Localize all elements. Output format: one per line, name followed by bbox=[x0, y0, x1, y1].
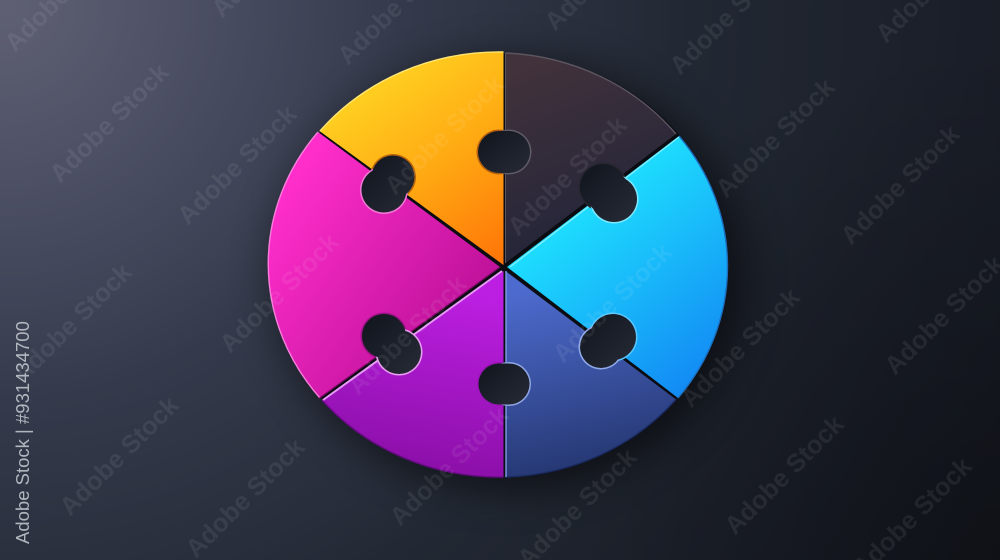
watermarks: Adobe Stock bbox=[379, 70, 510, 200]
piece: yellow bbox=[320, 52, 504, 265]
watermarks: Adobe Stock bbox=[44, 58, 175, 188]
watermarks: Adobe Stock bbox=[710, 73, 841, 203]
watermarks: Adobe Stock bbox=[675, 283, 806, 413]
watermarks: Adobe Stock bbox=[54, 391, 185, 521]
disk shadow bbox=[276, 60, 740, 488]
watermarks: Adobe Stock bbox=[835, 120, 966, 250]
watermarks: Adobe Stock bbox=[7, 258, 138, 388]
piece: dark bbox=[506, 53, 676, 263]
hole: blue and purple joint bbox=[477, 362, 531, 406]
piece: blue bbox=[506, 271, 676, 477]
watermarks: Adobe Stock bbox=[342, 270, 473, 400]
watermarks: Adobe Stock bbox=[172, 100, 303, 230]
panel: puzzle disk bbox=[268, 52, 740, 488]
vertical credit text: Adobe Stock | #931434700 bbox=[12, 321, 33, 544]
hole: yellow and dark joint bbox=[476, 130, 532, 174]
hole: cyan and blue joint bbox=[578, 312, 638, 370]
watermarks: Adobe Stock bbox=[214, 228, 345, 358]
hole: purple and magenta joint bbox=[360, 312, 422, 376]
piece: purple bbox=[322, 271, 504, 477]
piece: magenta bbox=[268, 132, 500, 398]
disk backing bbox=[270, 54, 728, 476]
hole: yellow and magenta joint bbox=[360, 154, 416, 214]
hole: dark and cyan joint bbox=[578, 162, 638, 224]
watermarks: Adobe Stock bbox=[384, 401, 515, 531]
piece: cyan bbox=[507, 136, 728, 398]
edge highlights bbox=[268, 52, 728, 477]
watermarks: Adobe Stock bbox=[719, 410, 850, 540]
watermarks: Adobe Stock bbox=[547, 238, 678, 368]
watermarks: Adobe Stock bbox=[180, 433, 311, 560]
watermarks: Adobe Stock bbox=[502, 111, 633, 241]
